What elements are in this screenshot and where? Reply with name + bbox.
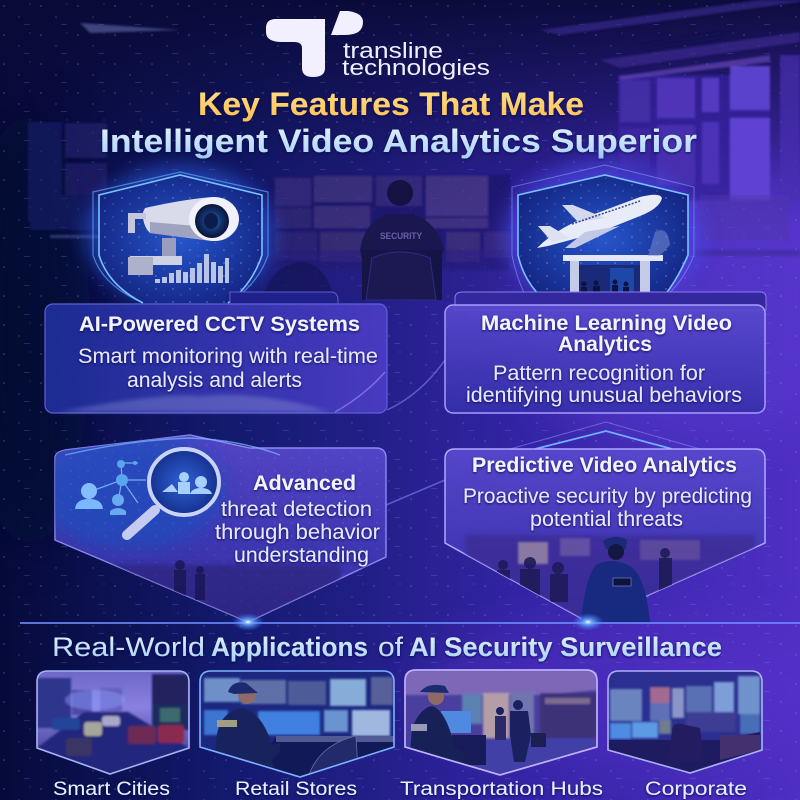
background: security guard at monitor wall: SECURITY <box>380 231 422 241</box>
card text: through behavior <box>215 521 380 544</box>
network of people icon <box>75 460 146 515</box>
icon: airplane shield <box>503 163 703 307</box>
thumbnail: corporate <box>608 671 762 773</box>
card text: potential threats <box>530 508 683 531</box>
logo <box>266 11 490 80</box>
card text <box>215 498 380 567</box>
card text <box>466 362 742 407</box>
background: control room ceiling and windows <box>80 0 800 256</box>
card text <box>78 345 378 392</box>
card heading: AI-Powered CCTV Systems <box>79 313 360 336</box>
card text: analysis and alerts <box>127 369 302 392</box>
glowing divider <box>20 613 800 631</box>
card heading <box>481 312 732 356</box>
title: Key Features That Make <box>198 86 584 122</box>
thumbnail captions: Smart Cities <box>53 779 170 800</box>
card text: Pattern recognition for <box>493 362 705 385</box>
card heading: Predictive Video Analytics <box>472 454 737 477</box>
thumbnail: transportation hubs <box>405 670 597 775</box>
thumbnail captions: Transportation Hubs <box>400 779 603 800</box>
section heading: AI Security Surveillance <box>409 632 722 662</box>
surveillance scene <box>465 535 755 625</box>
thumbnail captions: Retail Stores <box>235 779 357 800</box>
background: security guard at monitor wall <box>260 175 540 300</box>
card heading: Machine Learning Video <box>481 312 732 335</box>
panel: Advanced threat detection <box>35 430 386 625</box>
card text: threat detection <box>221 498 372 521</box>
thumbnail captions <box>53 779 747 800</box>
section heading: Applications <box>211 632 368 662</box>
card text <box>463 485 752 531</box>
section heading: of <box>378 632 404 662</box>
terminal building <box>563 255 663 300</box>
thumbnail captions: Corporate <box>645 779 747 800</box>
background: left wall monitors <box>28 122 140 238</box>
title: Intelligent Video Analytics Superior <box>100 123 697 159</box>
panel: Predictive Video Analytics <box>445 422 765 625</box>
panel: AI-Powered CCTV Systems <box>45 292 387 413</box>
bar chart <box>155 254 229 283</box>
thumbnail: smart cities <box>37 671 189 774</box>
logo: transline <box>343 38 443 63</box>
card text: Proactive security by predicting <box>463 485 752 508</box>
card heading: Advanced <box>253 472 356 495</box>
security officer <box>581 537 650 622</box>
icon: magnifying glass <box>127 449 219 535</box>
thumbnail: retail stores <box>200 671 394 790</box>
logo: technologies <box>342 55 490 80</box>
section heading <box>52 632 722 662</box>
card heading: Analytics <box>558 333 652 356</box>
camera body <box>128 197 239 241</box>
card text: understanding <box>234 544 369 567</box>
title <box>100 86 697 159</box>
icon: camera shield <box>85 165 275 305</box>
airplane <box>537 195 662 248</box>
card text: identifying unusual behaviors <box>466 384 742 407</box>
card text: Smart monitoring with real-time <box>78 345 378 368</box>
camera mount <box>128 238 182 275</box>
section heading: Real-World <box>52 632 205 662</box>
panel: Machine Learning Video Analytics <box>445 292 766 413</box>
